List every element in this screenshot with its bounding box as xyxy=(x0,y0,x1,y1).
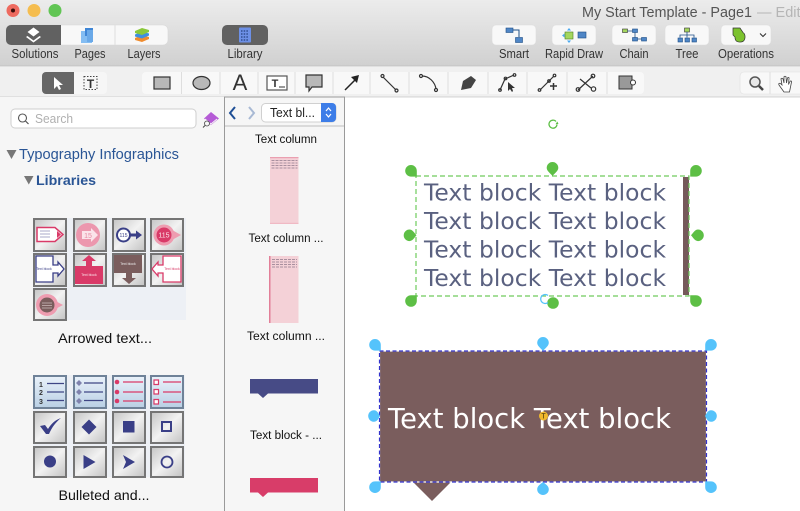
selection outline white xyxy=(380,351,706,482)
tile: triangle xyxy=(74,447,106,477)
library item: text column: Text column xyxy=(255,134,317,146)
icon: scissors xyxy=(576,74,596,91)
library navigation and selector xyxy=(225,103,344,126)
icon: speech bubble xyxy=(306,75,322,91)
toolbar: library button xyxy=(222,25,268,61)
tile: navy circle arrow: 115 xyxy=(120,233,128,239)
toolbar: chain button xyxy=(612,25,656,61)
window controls xyxy=(6,4,62,17)
tile: pink circle arrow xyxy=(74,219,106,251)
icon: text box: T xyxy=(272,78,279,90)
toolbar: rapid draw button: Rapid Draw xyxy=(545,47,604,61)
tree: libraries: Libraries xyxy=(36,172,96,188)
tile: pink up arrow xyxy=(74,254,106,286)
tile: navy right arrow: Text block xyxy=(36,267,52,271)
icon: edit points xyxy=(499,74,516,92)
icon: solutions browser shortcut xyxy=(203,112,219,128)
text lines: Text block Text block xyxy=(423,264,666,292)
toolbar: solutions, pages, layers segmented control: Pages xyxy=(74,47,106,61)
tile: diamond list xyxy=(74,376,106,408)
selection handles: blue xyxy=(368,337,717,495)
tile: navy right arrow xyxy=(34,254,66,286)
tile: pink circle pointer: 115 xyxy=(158,232,170,240)
text lines: Text block Text block xyxy=(423,236,666,264)
tile: dot list xyxy=(113,376,145,408)
tool group: select and text edit xyxy=(42,72,107,94)
tile: numbered list: 3 xyxy=(39,399,43,406)
icon: ellipse xyxy=(193,76,210,90)
icon: arrow xyxy=(345,75,359,90)
toolbar: library button: Library xyxy=(228,47,263,61)
tile: square list xyxy=(151,376,183,408)
toolbar: tree button xyxy=(665,25,709,61)
toolbar: chain button: Chain xyxy=(620,47,649,61)
caption: bulleted: Bulleted and... xyxy=(58,487,150,503)
icon: pen xyxy=(461,76,476,90)
tool group: zoom and hand xyxy=(740,72,800,94)
text lines: Text block Text block xyxy=(423,179,666,207)
rotation handle: blue xyxy=(541,294,548,304)
tree: typography infographics: Typography Infographics xyxy=(19,147,179,163)
toolbar: solutions, pages, layers segmented control: Solutions xyxy=(12,47,58,61)
tile: pink circle pointer xyxy=(151,219,183,251)
tile: chevron pointer xyxy=(113,447,145,477)
toolbar: operations button: Operations xyxy=(718,47,774,61)
tile: pink circle arrow: 15 xyxy=(84,233,92,240)
library item: pink text column top border xyxy=(270,157,298,224)
window title: — Edit xyxy=(757,5,800,21)
tile: navy circle arrow xyxy=(113,219,145,251)
tile: circle xyxy=(34,447,66,477)
icon: text box xyxy=(267,76,287,90)
caption: arrowed text: Arrowed text... xyxy=(58,330,152,346)
tool group: drawing shapes xyxy=(142,70,644,95)
toolbar: rapid draw button xyxy=(545,25,604,61)
icon: shape with point xyxy=(619,76,636,89)
selection outline xyxy=(416,176,689,296)
library item: pink text block xyxy=(250,478,318,497)
window title: My Start Template - Page1 xyxy=(582,5,752,21)
icon: line xyxy=(381,74,398,92)
tile: numbered list: 1 xyxy=(39,382,43,389)
tool group: select and text edit: T xyxy=(87,77,95,91)
tile: numbered list xyxy=(34,376,66,408)
drawing toolbar background xyxy=(0,66,800,97)
icon: layers xyxy=(135,28,149,42)
toolbar: tree button: Tree xyxy=(676,47,699,61)
tile: pink left arrow: Text block xyxy=(164,267,180,271)
tile: hollow circle xyxy=(151,447,183,477)
text lines: Text block Text block xyxy=(423,207,666,235)
caption: text block: Text block - ... xyxy=(250,430,322,442)
library item: pink text column left border xyxy=(269,256,298,323)
toolbar: solutions, pages, layers segmented control: Layers xyxy=(128,47,160,61)
callout pointer xyxy=(413,482,451,501)
library panel background xyxy=(224,97,344,511)
vertical brown bar xyxy=(683,177,689,295)
tile: brown circle pointer xyxy=(34,289,66,320)
tile: check mark xyxy=(34,412,66,443)
selection handles: green xyxy=(404,162,704,309)
callout body xyxy=(380,351,706,482)
icon: pages xyxy=(81,28,93,43)
tile: square xyxy=(113,412,145,443)
library preview: arrowed text xyxy=(33,218,186,320)
icon: add point xyxy=(538,74,557,91)
caption: text column 2: Text column ... xyxy=(248,233,324,245)
text lines xyxy=(423,179,666,292)
icon: arc xyxy=(420,74,438,92)
search field: Search xyxy=(35,112,73,126)
caption: text column 3: Text column ... xyxy=(247,331,325,343)
tile: pink up arrow: Text block xyxy=(81,273,97,277)
selection outline blue xyxy=(380,351,706,482)
library item: navy text block xyxy=(250,379,318,398)
selected brown callout text block xyxy=(380,351,706,501)
tile: brown down arrow xyxy=(113,254,145,286)
tile: numbered list: 2 xyxy=(39,390,43,397)
text cursor handle xyxy=(539,412,548,420)
callout text: Text block Text block xyxy=(387,404,671,435)
canvas background xyxy=(345,98,800,511)
selected text block with vertical bar xyxy=(416,176,689,296)
tile: brown down arrow: Text block xyxy=(120,262,136,266)
search field xyxy=(11,109,196,128)
tile: hollow square xyxy=(151,412,183,443)
library preview: bulleted xyxy=(33,375,185,477)
tile: diamond xyxy=(74,412,106,443)
title bar and main toolbar background xyxy=(0,0,800,66)
icon: rectangle xyxy=(154,77,170,89)
library navigation and selector: Text bl... xyxy=(270,106,315,120)
left panel background xyxy=(0,97,224,511)
toolbar: solutions, pages, layers segmented control xyxy=(6,25,168,61)
icon: solutions xyxy=(26,28,41,42)
toolbar: operations button xyxy=(718,25,774,61)
rotation handle: green xyxy=(549,120,558,128)
tile: tag arrow xyxy=(34,219,66,251)
tile: pink left arrow xyxy=(151,254,183,286)
icon: text tool: A xyxy=(233,70,248,95)
toolbar: smart button: Smart xyxy=(499,47,529,61)
toolbar: smart button xyxy=(492,25,536,61)
